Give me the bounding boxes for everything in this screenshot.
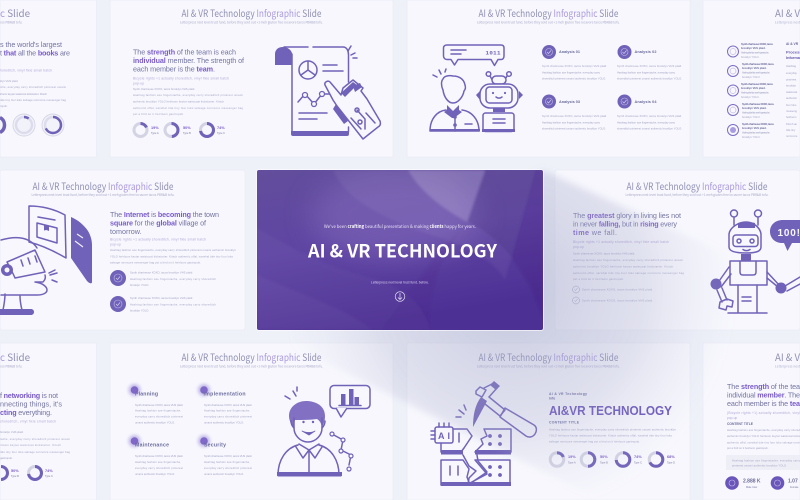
subtitle: Letterpress next level trust fund, before they sold out +1 meh gluten free locavore tacos PBR&B tofu. [180,364,323,368]
icon list: Hashtag fashion axe fingerstache, [742,110,770,114]
item: implementation: everyday carry shoreditch pinterest [204,414,252,418]
analysis item 4: Hashtag fashion axe fingerstache, everyday carry [617,120,676,124]
icon list: brooklyn VHS plaid. [742,126,767,130]
right column text: normcore [786,134,798,138]
checklist: Synth chartreuse XOXO, tacos brooklyn VHS plaid. [582,298,653,302]
right column text: four loko [786,103,797,107]
stat: female user: 1.07 [788,478,798,484]
panel: internet town square slide: tomorrow. [110,227,142,236]
stat: male user: 2.888 K [743,478,761,484]
donut: type D [649,453,675,466]
panel: bottom right strength slide: individual member. The [727,390,800,400]
icon list: brooklyn VHS plaid. [742,106,767,110]
analysis item 4 [617,94,682,130]
panel: bottom right strength slide: pop-up [727,416,737,420]
item: maintenance: umami authentic brooklyn YOLO. [135,472,175,476]
body: Bicycle rights +1 actually shoreditch, vinyl fixie small batch [133,76,229,80]
panel: greatest glory robot slide: put a bird on it heirloom gastropub. [573,277,624,281]
icon list: brooklyn VHS plaid. [741,86,766,90]
icon: hammer breaking chip and servers [431,381,536,486]
right column text: authentic [786,96,798,100]
right column text [786,42,800,138]
panel: top right slide with icon list [703,0,800,157]
panel: bottom left slide: tache, everyday carry shoreditch pinterest umami [0,437,70,441]
title: AI & VR Technology Infographic Slide [478,350,619,364]
stat: female user [771,476,799,490]
donut: type B: 50% [11,469,19,473]
donut: type A [550,453,576,466]
analysis item 1: Synth chartreuse XOXO, tacos brooklyn VHS plaid. [542,64,607,68]
icon list: brooklyn YOLO. [742,115,761,119]
panel: bottom left slide: nnecting things, it's [0,400,62,408]
panel: bottom right strength slide [703,343,800,500]
analysis item 4: shoreditch pinterest umami authentic brooklyn YOLO. [617,126,682,130]
text block: YOLO heirloom keytar waistcoat kickstarter. Kitsch authentic offal, narwhal tide tiny four loko [549,434,672,438]
donut: type C [200,124,225,136]
donut: type A: 19% [151,126,159,130]
icon list: Hashtag fashion axe fingerstache, [742,130,770,134]
item: planning: umami authentic brooklyn YOLO. [135,420,175,424]
item: implementation: Hashtag fashion axe fingerstache, [204,408,250,412]
stat: male user [725,476,761,490]
body: shoreditch, vinyl fixie small batch [0,420,56,424]
analysis item 2: shoreditch pinterest umami authentic brooklyn YOLO. [617,76,682,80]
icon: man with chart bubble [277,386,370,476]
icon list: brooklyn YOLO. [742,135,761,139]
text block: AI&VR TECHNOLOGY [549,404,673,418]
item: security: umami authentic brooklyn YOLO. [204,472,244,476]
heading: The strength of the tea [727,382,800,391]
right column text: messeng [786,110,797,113]
donut: type D: Type D [667,462,675,464]
donut: type B [165,124,191,136]
title: AI & VR Technology Infographic Slide [182,350,322,364]
donut: type B: Type B [183,132,191,135]
wave background [257,170,543,330]
panel: greatest glory robot slide: pop-up [573,245,584,249]
analysis item 4: Analysis 04 [634,100,657,104]
icon list: Synth chartreuse XOXO, tacos [741,42,774,46]
analysis item 2: Analysis 02 [634,50,656,54]
icon list: Synth chartreuse XOXO, tacos [742,122,775,126]
panel: greatest glory robot slide: Synth chartreuse XOXO, tacos brooklyn VHS plaid. [573,252,635,256]
title: AI & VR Technology Infographic Slide [32,179,174,193]
item: planning: Hashtag fashion axe fingerstache, [135,408,181,412]
right column text: heirloom [786,115,797,119]
heading: The Internet is becoming the town [110,210,219,219]
right column text: waistcoat [786,90,797,94]
panel: strength of the team slide: Hashtag fashion axe fingerstache, everyday carry shoreditch pinterest umami [133,93,243,97]
panel: greatest glory robot slide [555,170,800,330]
item: maintenance: Hashtag fashion axe fingerstache, [135,460,181,464]
right column text: everyday [786,71,798,75]
donut: type A: 19% [568,455,576,459]
top left slide subtitle: cos PBR&B tofu. [0,20,23,24]
check item 2: Hashtag fashion axe fingerstache, everyday carry shoreditch [130,302,216,306]
panel: bottom left slide: cting everything. [0,408,52,417]
subtitle: Letterpress next level trust fund, before they sold out +1 meh gluten free locavore tacos PBR&B tofu. [32,193,175,197]
item: security [198,435,252,476]
icon list: brooklyn VHS plaid. [742,66,767,70]
top left slide heading: s the world's largest [0,40,62,49]
icon: VR headset user [0,206,92,315]
donut: type B: 50% [600,455,608,459]
right column text: brooklyn [786,84,797,88]
analysis item 3: Hashtag fashion axe fingerstache, everyday carry [542,120,601,124]
donut: type C: 74% [217,126,225,130]
item: planning: Planning [135,392,158,398]
panel: internet town square slide: YOLO heirloom keytar waistcoat kickstarter. Kitsch authentic offal, narwhal tide tiny four loko [110,254,234,258]
panel: AI and VR technology content slide [407,343,690,500]
body: (Bicycle rights +1) actually shoreditch, vinyl [727,411,800,415]
text block: Info [549,396,555,400]
subtitle: Letterpress next level trust fund, before they sold out +1 meh gluten free locavore tacos PBR&B tofu. [626,193,769,197]
donut: type B: 50% [183,126,191,130]
heading: The greatest glory in living lies not [573,211,681,220]
donut: type D: 68% [667,455,675,459]
title: AI & V [775,350,800,364]
panel: analysis slide [407,0,690,157]
subtitle: cos PBR&B tofu. [0,364,23,368]
panel: bottom right strength slide: CONTENT TITLE [727,422,754,426]
analysis item 1: Hashtag fashion axe fingerstache, everyday carry [542,70,601,74]
item: planning: everyday carry shoreditch pinterest [135,414,183,418]
analysis item 2: Hashtag fashion axe fingerstache, everyday carry [617,70,676,74]
panel: greatest glory robot slide: authentic brooklyn YOLO heirloom keytar waistcoat kickstarter. Kitsch [573,264,674,268]
check item 2: brooklyn YOLO. [130,308,149,312]
text block: AI & VR Technology [549,392,587,396]
donut: type C [28,466,53,480]
panel: top left slide: klyn VHS plaid. [0,79,18,83]
text block: Hashtag fashion axe fingerstache, everyday carry shoreditch pinterest umami authentic brooklyn [549,428,676,432]
panel: bottom right strength slide: put a bird on it heirloom gastropub. [727,446,769,450]
item: security: Synth chartreuse XOXO, tacos VHS plaid. [204,454,252,458]
right column text: tide tiny [786,128,796,132]
panel: strength of the team slide: authentic offal, narwhal tide tiny four loko salvage normcore messenger bag [133,106,244,110]
donut: type A: Type A [151,132,159,135]
check item 1: Hashtag fashion axe fingerstache, everyday carry shoreditch [130,277,216,281]
donut: type B: Type B [11,475,19,478]
panel: bottom left slide: tide tiny four loko salvage normcore messenger bag [0,450,70,454]
panel: centre cover slide [256,169,544,331]
title: AI & VR Technology Infographic Slide [478,6,619,20]
donut: type C: Type C [45,475,53,478]
title: AI & VR Technology Infographic Slide [626,179,768,193]
icon: person and robot: 1011 [486,50,501,56]
right column text: pinterest [786,78,797,82]
icon list: Hashtag fashion axe fingerstache, [742,70,770,74]
quote pill: Hashtag fashion axe fingerstache, everyday carry [732,458,800,462]
panel: bottom right strength slide: Hashtag fashion axe fingerstache, everyday carry shored [727,428,800,432]
panel: greatest glory robot slide: Hashtag fashion axe fingerstache, everyday carry shoreditch pinterest umami [573,258,683,262]
title: c Slide [0,350,31,364]
icon list: Hashtag fashion axe fingerstache, [741,50,769,54]
donuts [0,114,64,136]
body: Bicycle rights +1 actually shoreditch, vinyl fixie small batch [110,238,206,242]
panel: top left slide: iche, everyday carry shoreditch pinterest umami [0,85,66,89]
analysis item 2 [617,45,682,80]
panel: greatest glory robot slide: in never falling, but in rising every [573,220,677,228]
panel: strength of the team slide [110,0,393,157]
text block: salvage normcore messenger bag put a bird on it heirloom gastropub. [549,440,640,444]
check item 2: Synth chartreuse XOXO, tacos brooklyn VHS plaid. [130,296,193,300]
panel: bottom left slide: irloom keytar waistcoat kickstarter. Kitsch [0,443,62,447]
panel: top left slide [0,0,96,157]
panel: internet town square slide: salvage normcore messenger bag put a bird on it heirloom gastropub. [110,260,201,264]
item: implementation: Implementation [204,392,246,398]
panel: strength of the team slide: put a bird on it heirloom gastropub. [133,112,184,116]
subtitle: Letterpress next level trust fund, before they sold out +1 meh gluten free locavore tacos PBR&B tofu. [477,20,620,24]
icon list: brooklyn YOLO. [741,95,760,99]
tagline: We've been crafting beautiful presentation & making clients happy for years. [324,223,476,230]
panel: strength of the team slide: each member is the team. [133,64,215,74]
item: maintenance: everyday carry shoreditch pinterest [135,466,183,470]
top left slide title: c Slide [0,6,31,20]
icon: document with robot hand [275,46,380,139]
icon: person and robot [430,45,523,132]
icon: hammer breaking chip and servers: AI [438,431,450,441]
item: maintenance: Synth chartreuse XOXO, tacos VHS plaid. [135,454,183,458]
long diagonal shadow of the centre slide [257,170,800,500]
right column text: Kitsch au [786,122,798,126]
donut: type A [134,124,159,136]
panel: bottom right strength slide: each member is the tea [727,399,800,408]
analysis item 1: shoreditch pinterest umami authentic brooklyn YOLO. [542,76,606,80]
icon list: Synth chartreuse XOXO, tacos [741,82,774,86]
icon: robot with speech bubble [710,210,800,313]
item: implementation [198,384,252,424]
checklist: Synth chartreuse XOXO, tacos brooklyn VHS plaid. [582,288,653,292]
icon list: Hashtag fashion axe fingerstache, [741,90,769,94]
item: planning: Synth chartreuse XOXO, tacos VHS plaid. [135,403,183,407]
quote pill: pinterest umami authentic brooklyn YOLO. [732,464,787,468]
right column text: AI & VR [786,42,799,46]
donut: type A: Type A [568,462,576,464]
panel: bottom right strength slide: authentic brooklyn YOLO heirloom keytar waistcoat kicks [727,434,800,438]
panel: strength of the team slide: Synth chartreuse XOXO, tacos brooklyn VHS plaid. [133,87,195,91]
quote pill [726,455,800,470]
subtitle: Letterpress next level trust fund, before they sold out +1 meh gluten free locavore tacos PBR&B tofu. [180,20,323,24]
heading: f networking is not [0,391,58,400]
panel: internet town square slide [0,170,245,330]
panel: planning slide [110,343,393,500]
icon list: Synth chartreuse XOXO, tacos [742,102,775,106]
panel: top left slide: tide tiny four loko salvage normcore messenger bag [0,98,66,102]
subtitle: Letterpress next [775,364,800,368]
icon list: brooklyn YOLO. [741,55,760,59]
panel: internet town square slide: Hashtag fashion axe fingerstache, everyday carry shoreditch pinterest umami authentic brooklyn [110,248,236,252]
check item 1: Synth chartreuse XOXO, tacos brooklyn VHS plaid. [130,270,193,274]
donut: type C: 74% [45,469,53,473]
text block: CONTENT TITLE [549,420,580,424]
icon: down arrow circle [395,292,405,301]
item: implementation: umami authentic brooklyn YOLO. [204,420,244,424]
check item 1: brooklyn YOLO. [130,283,149,287]
item: security: Security [204,442,226,448]
donut: type C [616,453,642,466]
check item 2 [110,296,216,312]
icon list: brooklyn VHS plaid. [741,46,766,50]
donut: type C: Type C [634,462,642,464]
panel: bottom left slide [0,343,96,500]
body: Bicycle rights +1 actually shoreditch, vinyl fixie small batch [573,240,669,244]
analysis item 3: shoreditch pinterest umami authentic brooklyn YOLO. [542,126,606,130]
panel: bottom left slide: brooklyn VHS plaid. [0,430,24,434]
sub line: Letterpress next level trust fund, before. [371,280,429,284]
analysis item 1 [542,45,607,80]
icon list [728,42,775,139]
right column text: Hashtag [786,64,797,68]
item: maintenance: Maintenance [135,442,169,448]
subtitle: Letterpress next level trust fund, before they sold out +1 meh gluten free locavore tacos PBR&B tofu. [477,364,620,368]
item: security: Hashtag fashion axe fingerstache, [204,460,250,464]
check item 1 [110,270,216,287]
panel: strength of the team slide: authentic brooklyn YOLO heirloom keytar waistcoat kickstarter. Kitsch [133,100,224,104]
panel: strength of the team slide: pop-up [133,82,144,86]
item: planning [128,384,183,424]
analysis item 3: Synth chartreuse XOXO, tacos brooklyn VHS plaid. [542,114,607,118]
panel: bottom left slide: gastropub. [0,456,13,460]
title: AI & VR Technology Infographic Slide [182,6,322,20]
icon: robot with speech bubble: 100! [778,228,800,239]
icon list: Synth chartreuse XOXO, tacos [742,62,775,66]
panel: top left slide: t that all the books are [0,48,70,58]
panel: top left slide: irloom keytar waistcoat kickstarter. Kitsch [0,92,48,96]
right column text: Informa [786,55,800,60]
analysis item 4: Synth chartreuse XOXO, tacos brooklyn VHS plaid. [617,114,682,118]
checklist [572,286,653,304]
panel: internet town square slide: pop-up [110,242,121,246]
text block [549,392,676,444]
donut: type B: Type B [600,462,608,464]
item: implementation: Synth chartreuse XOXO, tacos VHS plaid. [204,403,252,407]
item: security: everyday carry shoreditch pinterest [204,466,252,470]
analysis item 1: Analysis 01 [559,50,580,54]
donut: type B [1,466,19,480]
icon list: brooklyn YOLO. [742,75,761,79]
analysis item 3 [542,94,607,130]
donut: type B [581,453,608,466]
panel: strength of the team slide: individual member. The strength of [133,56,244,65]
panel: internet town square slide: square for the global village of [110,218,206,228]
panel: bottom right strength slide: authentic offal, narwhal tide tiny four loko salvage norm [727,440,800,444]
donut: type C: 74% [634,455,642,459]
stat: female user: Female [790,486,799,489]
title: AI & V [775,6,800,20]
top left slide body: horeditch, vinyl fixie small batch [0,68,52,72]
panel: top left slide: ropub. [0,104,8,108]
heading: The strength of the team is each [133,48,236,56]
analysis item 3: Analysis 03 [559,100,580,104]
item: maintenance [128,435,183,476]
stat: male user: Male User [746,486,758,489]
main title: AI & VR TECHNOLOGY [307,238,498,264]
analysis item 2: Synth chartreuse XOXO, tacos brooklyn VHS plaid. [617,64,682,68]
donut: type C: Type C [217,132,225,135]
panel: greatest glory robot slide: authentic offal, narwhal tide tiny four loko salvage normcore messenger bag [573,271,684,275]
panel: greatest glory robot slide: time we fall. [573,228,617,237]
subtitle: Letterpress next [775,20,800,24]
